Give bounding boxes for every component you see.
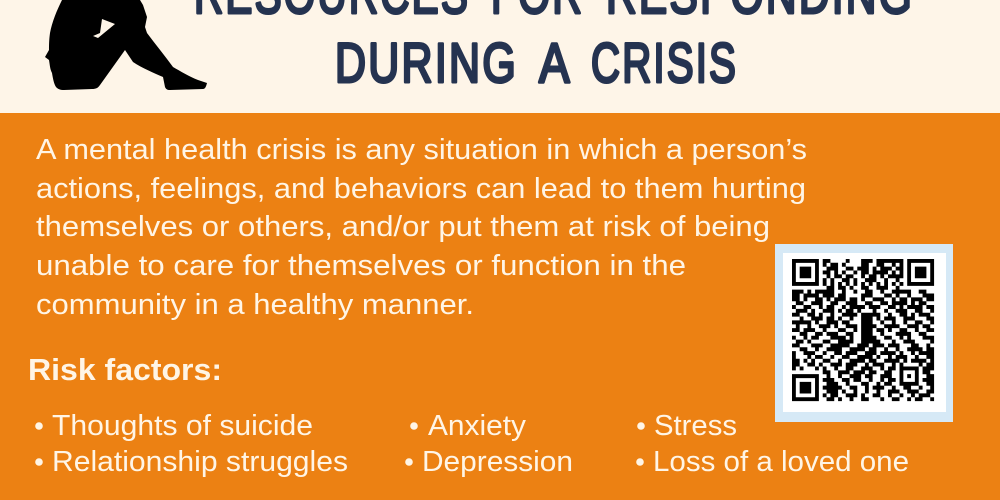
icon: seated person silhouette [45,0,207,90]
risk factor list: Stress [654,410,737,442]
risk factor list: Relationship struggles [52,446,348,478]
title [194,0,914,94]
risk factor list: Depression [422,446,573,478]
QR code card [775,244,953,422]
intro text block: unable to care for themselves or function in the [36,250,686,282]
intro text block: community in a healthy manner. [36,289,474,321]
title: CRISIS [591,31,738,94]
risk factor list [35,410,909,478]
intro text block: A mental health crisis is any situation in which a person’s [36,134,807,166]
title: DURING [335,31,518,94]
risk factor list: Anxiety [428,410,527,442]
risk factor list: Loss of a loved one [653,446,909,478]
heading: risk factors: Risk factors: [28,352,222,387]
header background panel [0,0,1000,113]
orange content panel [0,113,1000,500]
intro text block: themselves or others, and/or put them at risk of being [36,211,770,243]
risk factor list: Thoughts of suicide [52,410,313,442]
intro text block [36,134,807,321]
intro text block: actions, feelings, and behaviors can lead to them hurting [36,173,806,205]
title: A [539,31,572,94]
